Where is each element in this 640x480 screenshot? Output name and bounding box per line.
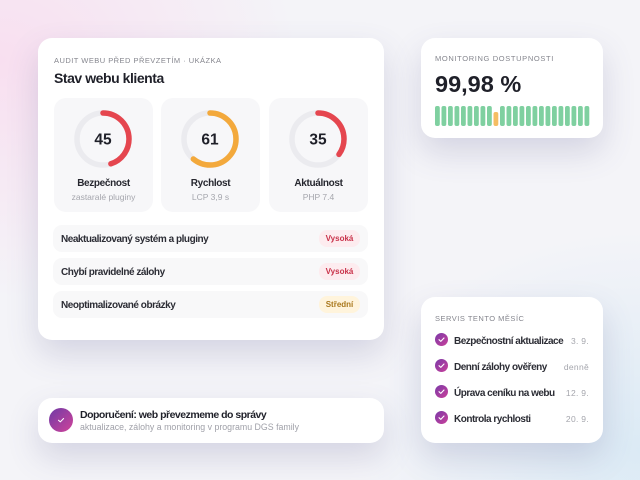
severity badge: [319, 296, 360, 313]
item name: Kontrola rychlosti: [454, 414, 531, 425]
recommendation detail: aktualizace, zálohy a monitoring v programu DGS family: [80, 422, 299, 432]
gauge: 61: 61: [201, 132, 219, 148]
icon: check: [435, 359, 448, 372]
gauge: 35: [290, 110, 347, 168]
severity badge: Vysoká: [326, 267, 353, 276]
panel: uptime monitoring: [421, 38, 603, 138]
audit eyebrow label: AUDIT WEBU PŘED PŘEVZETÍM · UKÁZKA: [54, 56, 222, 65]
finding row: outdated system: [53, 225, 368, 252]
service item: security updates: [435, 333, 589, 347]
finding text: Neaktualizovaný systém a pluginy: [61, 234, 208, 245]
finding row: images: [53, 291, 368, 318]
item name: Úprava ceníku na webu: [454, 388, 555, 399]
item name: Bezpečnostní aktualizace: [454, 336, 563, 347]
icon: check: [435, 411, 448, 424]
severity badge: [319, 230, 360, 247]
service label: SERVIS TENTO MĚSÍC: [435, 314, 524, 323]
tile label: Rychlost: [191, 178, 230, 189]
finding row: missing backups: [53, 258, 368, 285]
gauge: 61: [182, 110, 239, 168]
tile note: LCP 3,9 s: [192, 192, 229, 202]
icon: check: [435, 385, 448, 398]
finding text: Neoptimalizované obrázky: [61, 300, 175, 311]
gauge: 45: 45: [94, 132, 112, 148]
uptime bars: [435, 106, 590, 126]
gauge: 45: [74, 110, 132, 168]
heading: Stav webu klienta: [54, 70, 164, 86]
recommendation title: Doporučení: web převezmeme do správy: [80, 409, 266, 421]
service item: speed check: [435, 411, 589, 425]
item date: denně: [564, 362, 589, 372]
item name: Denní zálohy ověřeny: [454, 362, 547, 373]
icon: recommendation check: [49, 408, 73, 432]
panel: website audit: [38, 38, 384, 340]
gauge: 35: 35: [309, 132, 327, 148]
service item: backups: [435, 359, 589, 373]
item date: 3. 9.: [571, 336, 589, 346]
severity badge: Střední: [326, 300, 353, 309]
uptime label: MONITORING DOSTUPNOSTI: [435, 54, 554, 63]
score tile: speed: [161, 98, 260, 212]
service item: price list: [435, 385, 589, 399]
icon: check: [435, 333, 448, 346]
score tile: security: [54, 98, 153, 212]
item date: 20. 9.: [566, 414, 589, 424]
item date: 12. 9.: [566, 388, 589, 398]
panel: monthly service: [421, 297, 603, 443]
panel: recommendation: [38, 398, 384, 443]
tile label: Aktuálnost: [294, 178, 343, 189]
finding text: Chybí pravidelné zálohy: [61, 267, 165, 278]
uptime value: 99,98 %: [435, 71, 521, 97]
tile note: PHP 7.4: [303, 192, 334, 202]
severity badge: [319, 263, 360, 280]
severity badge: Vysoká: [326, 234, 353, 243]
score tile: currency: [269, 98, 368, 212]
tile note: zastaralé pluginy: [72, 192, 135, 202]
tile label: Bezpečnost: [77, 178, 130, 189]
